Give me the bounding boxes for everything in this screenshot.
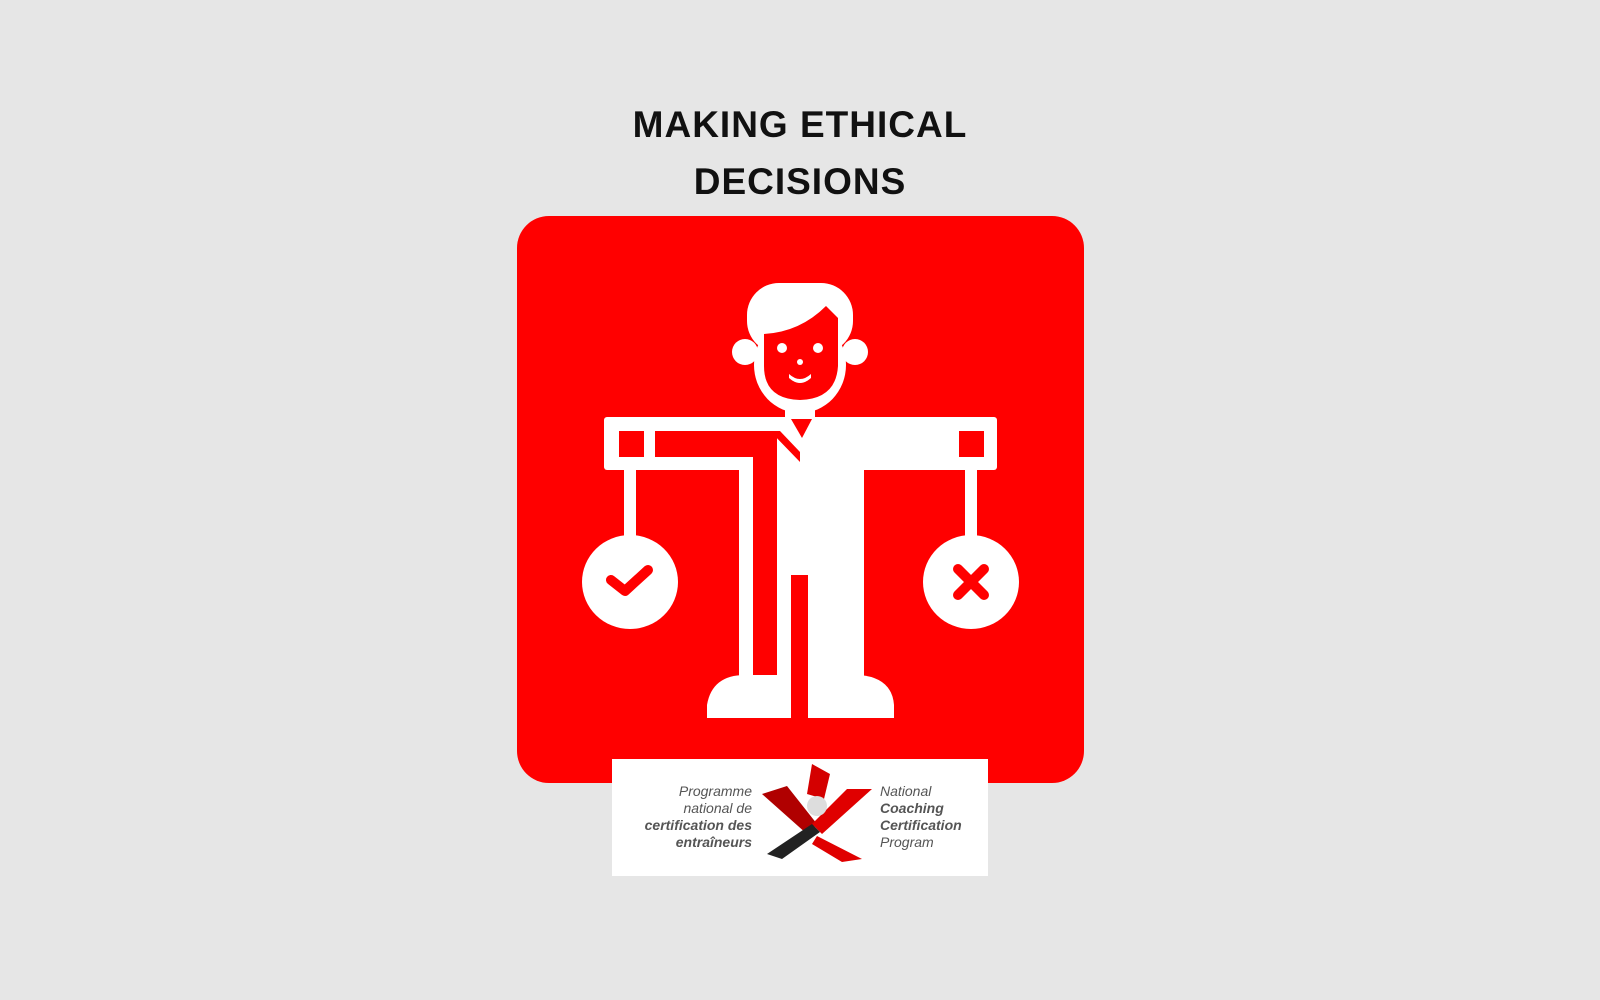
logo text french: Programme	[679, 783, 752, 799]
icon: person with scales	[582, 283, 1019, 718]
logo text english: Program	[880, 834, 934, 850]
logo text french	[645, 783, 752, 850]
title	[633, 104, 967, 202]
title: MAKING ETHICAL	[633, 104, 967, 145]
logo text english: National	[880, 783, 931, 799]
logo text french: national de	[683, 800, 752, 816]
logo text french: certification des	[645, 817, 752, 833]
cross mark	[958, 569, 984, 595]
title: DECISIONS	[694, 161, 906, 202]
logo text english: Coaching	[880, 800, 944, 816]
logo text english: Certification	[880, 817, 962, 833]
logo text english	[880, 783, 962, 850]
logo: NCCP	[612, 759, 988, 876]
logo text french: entraîneurs	[676, 834, 752, 850]
logo emblem	[762, 764, 872, 862]
check mark	[611, 570, 648, 591]
